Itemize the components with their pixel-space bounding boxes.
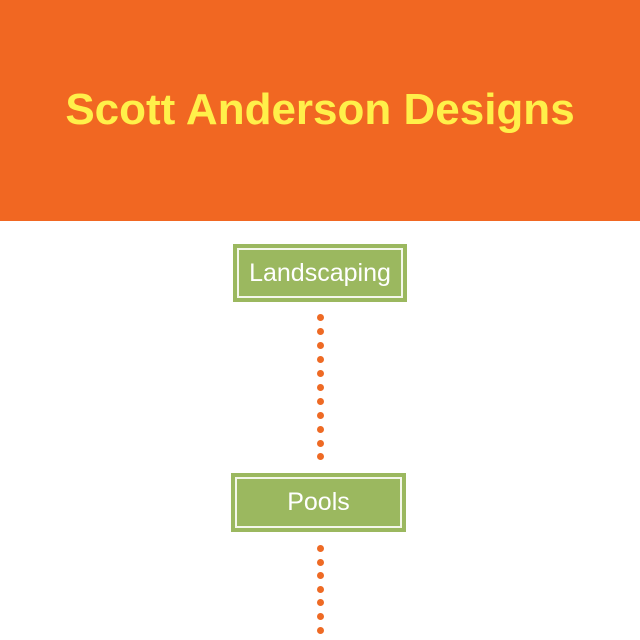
dotted connector 1 [317,314,324,460]
header banner [0,0,640,221]
title: Scott Anderson Designs [65,85,575,134]
box: Landscaping [233,244,407,302]
box: Landscaping: Landscaping [249,258,391,286]
box: Pools: Pools [287,488,350,516]
dotted connector 2 [317,545,324,634]
box: Pools [231,473,406,532]
